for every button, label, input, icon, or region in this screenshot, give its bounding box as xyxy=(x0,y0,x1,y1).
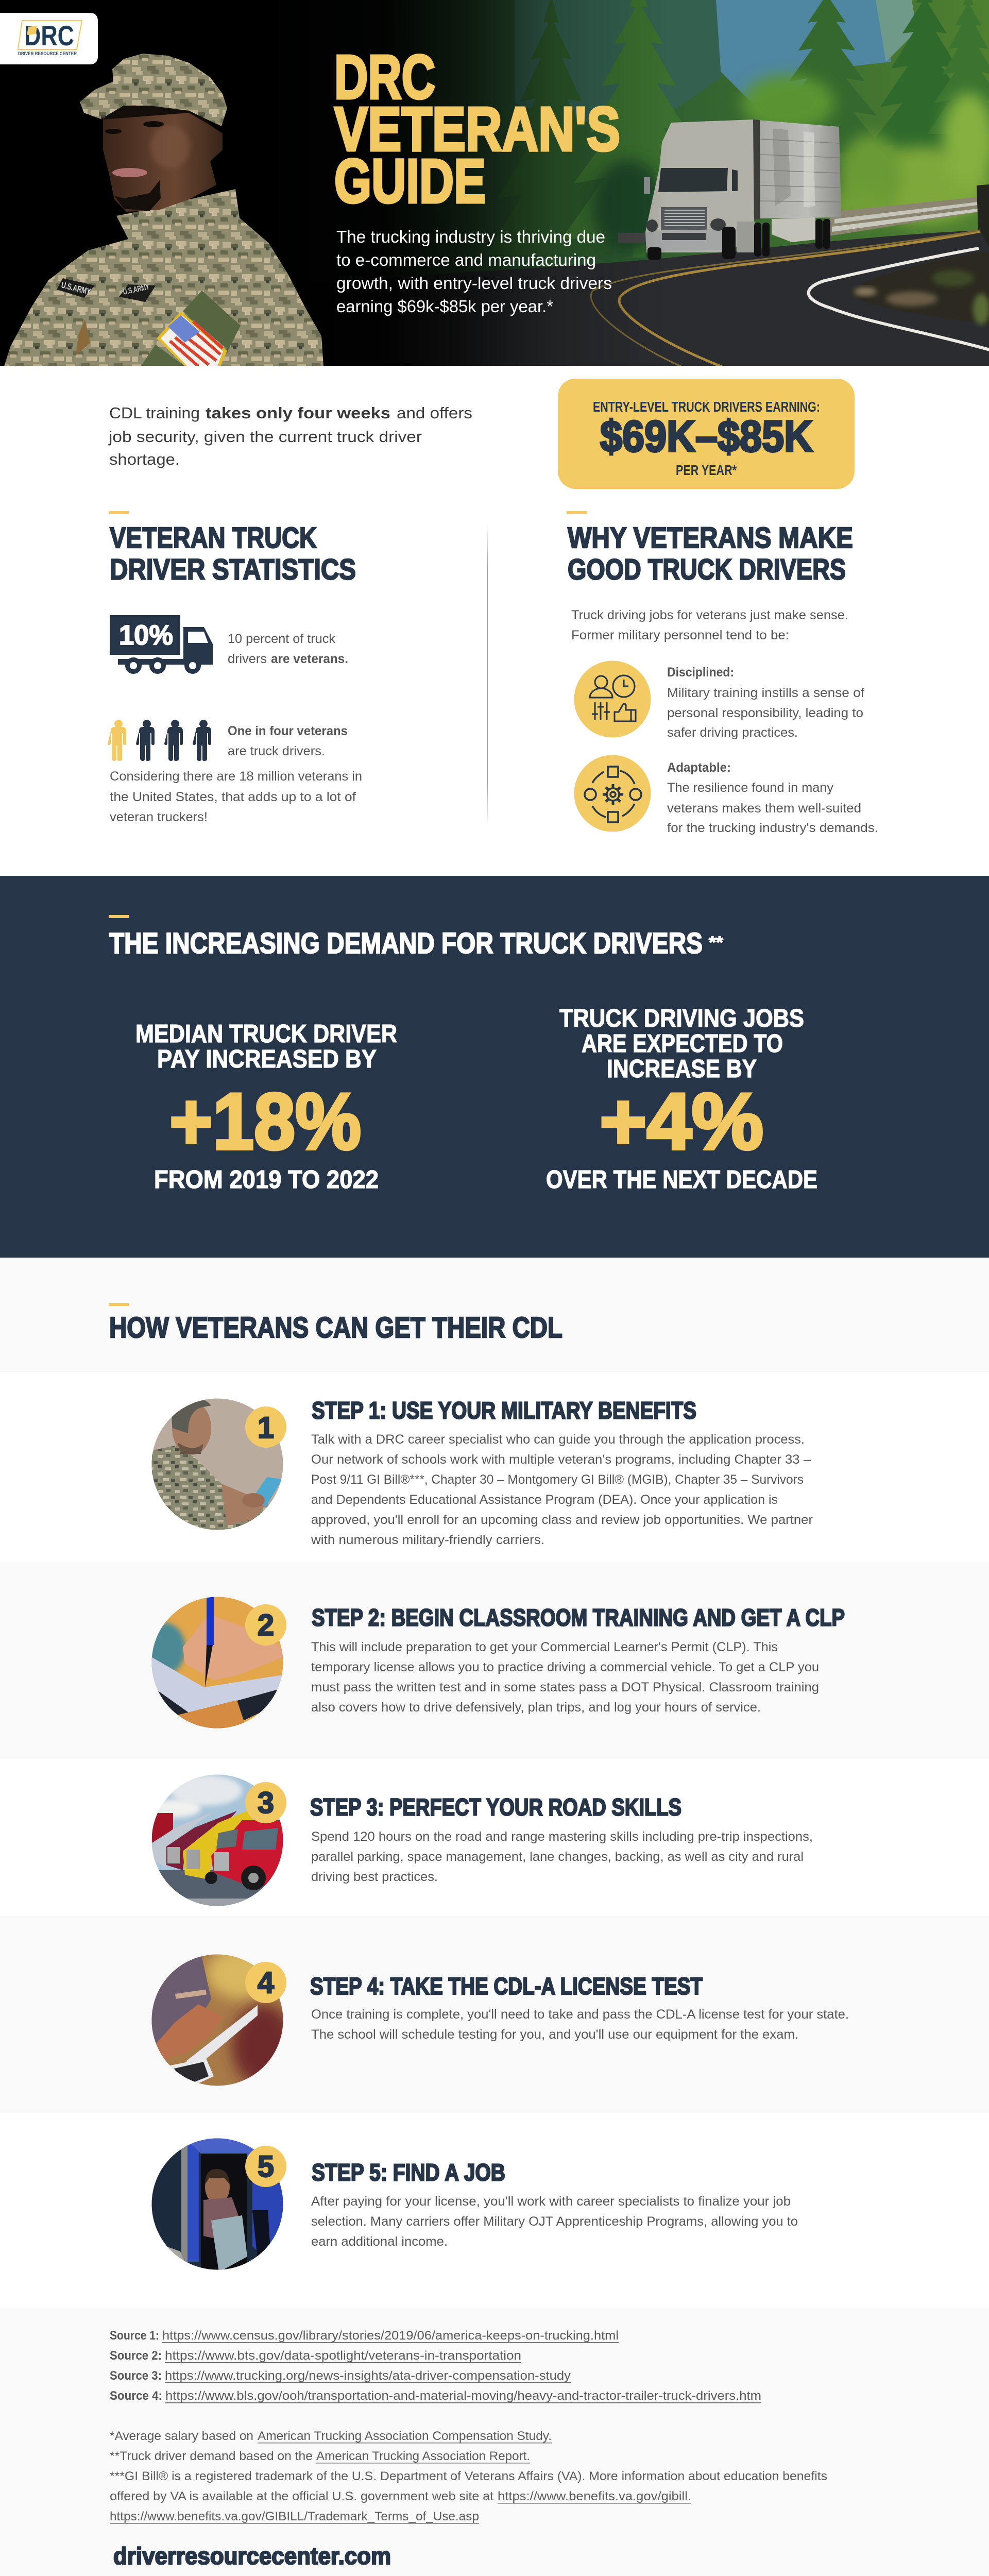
stat: 10 percent: are veterans. xyxy=(271,652,348,666)
icon: adaptable xyxy=(574,755,651,832)
stat: median pay: MEDIAN TRUCK DRIVER xyxy=(135,1020,397,1048)
step 5 body xyxy=(311,2194,798,2249)
step 5 xyxy=(0,2113,989,2308)
footnotes: https://www.benefits.va.gov/GIBILL/Trademark_Terms_of_Use.asp xyxy=(110,2510,479,2523)
step 2 body: This will include preparation to get your Commercial Learner's Permit (CLP). This xyxy=(311,1640,778,1654)
name tape left xyxy=(57,278,95,298)
hero title: VETERAN'S xyxy=(334,94,620,164)
stat: jobs increase xyxy=(546,1005,817,1194)
stat: 10 percent: 10 percent of truck xyxy=(228,632,335,646)
intro paragraph: and offers xyxy=(397,404,472,422)
block: disciplined: safer driving practices. xyxy=(667,725,798,740)
block: adaptable xyxy=(667,760,878,835)
photo: soldier with tablet xyxy=(149,1396,286,1535)
logo card xyxy=(0,13,98,64)
intro paragraph: CDL training xyxy=(109,404,200,422)
hero title xyxy=(334,42,620,216)
photo: trucks in a row xyxy=(149,1772,286,1911)
step 5 body: After paying for your license, you'll work with career specialists to finalize your job xyxy=(311,2194,791,2209)
heading: why veterans: GOOD TRUCK DRIVERS xyxy=(568,553,846,586)
step 2 heading: STEP 2: BEGIN CLASSROOM TRAINING AND GET A CLP xyxy=(312,1604,845,1631)
badge: 5: 5 xyxy=(258,2150,274,2183)
step 3 body: Spend 120 hours on the road and range mastering skills including pre-trip inspections, xyxy=(311,1829,813,1844)
step 4 heading: STEP 4: TAKE THE CDL-A LICENSE TEST xyxy=(310,1973,703,1999)
footnotes: American Trucking Association Compensation Study. xyxy=(258,2429,552,2443)
salary callout: ENTRY-LEVEL TRUCK DRIVERS EARNING: xyxy=(593,399,820,415)
badge: 2: 2 xyxy=(258,1608,274,1642)
panel: veteran truck driver statistics xyxy=(108,511,362,824)
heading: increasing demand: THE INCREASING DEMAND FOR TRUCK DRIVERS xyxy=(109,927,703,960)
sleeve chevron xyxy=(76,319,90,355)
icon: disciplined xyxy=(574,660,651,738)
salary callout: PER YEAR* xyxy=(676,462,737,478)
stat: one in four: are truck drivers. xyxy=(228,744,325,758)
step 2 body: also covers how to drive defensively, plan trips, and log your hours of service. xyxy=(311,1700,761,1715)
sources: Source 4: xyxy=(110,2389,162,2403)
intro paragraph: shortage. xyxy=(109,450,180,468)
stat: 10 percent xyxy=(228,632,348,666)
sources: https://www.bls.gov/ooh/transportation-and-material-moving/heavy-and-tractor-trailer-truck-drivers.htm xyxy=(165,2389,761,2403)
stat: 10 percent: drivers xyxy=(228,652,267,666)
hero paragraph: The trucking industry is thriving due xyxy=(336,227,605,246)
badge: 3 xyxy=(245,1782,286,1823)
sources xyxy=(110,2329,761,2403)
heading: why veterans: WHY VETERANS MAKE xyxy=(568,521,853,554)
footnotes: *Average salary based on xyxy=(110,2429,253,2443)
stat: median pay xyxy=(135,1020,397,1194)
sources: Source 1: xyxy=(110,2329,159,2343)
stat: median pay: +18% xyxy=(169,1077,361,1166)
step 1 body: with numerous military-friendly carriers. xyxy=(311,1533,544,1547)
intro paragraph: takes only four weeks xyxy=(206,404,390,422)
badge: 1: 1 xyxy=(258,1411,274,1445)
intro text xyxy=(571,608,848,642)
step 3 body xyxy=(311,1829,813,1884)
stat: jobs increase: INCREASE BY xyxy=(607,1055,757,1083)
step 1 heading: STEP 1: USE YOUR MILITARY BENEFITS xyxy=(312,1397,696,1424)
badge: 4: 4 xyxy=(258,1966,274,1999)
hero paragraph: to e-commerce and manufacturing xyxy=(336,250,596,269)
step 5 heading: STEP 5: FIND A JOB xyxy=(312,2159,505,2185)
semi truck xyxy=(644,120,841,260)
stat: one in four xyxy=(110,724,362,824)
step 1 xyxy=(0,1372,989,1562)
sources: Source 3: xyxy=(110,2369,162,2383)
step 4 body xyxy=(311,2007,849,2042)
stat: one in four: veteran truckers! xyxy=(110,810,208,824)
footnotes: https://www.benefits.va.gov/gibill. xyxy=(498,2489,691,2503)
intro paragraph: job security, given the current truck driver xyxy=(108,428,422,446)
heading: statistics: VETERAN TRUCK xyxy=(110,521,317,554)
velcro patch xyxy=(183,291,241,350)
hero title: GUIDE xyxy=(334,146,486,216)
block: disciplined: Disciplined: xyxy=(667,665,734,680)
block: disciplined: Military training instills a sense of xyxy=(667,686,864,700)
stat: jobs increase: TRUCK DRIVING JOBS xyxy=(559,1005,804,1032)
step 1 body xyxy=(311,1432,813,1547)
footnotes: American Trucking Association Report. xyxy=(316,2449,530,2463)
sources: Source 2: xyxy=(110,2349,162,2363)
footnotes: offered by VA is available at the official U.S. government web site at xyxy=(110,2489,493,2503)
block: adaptable: veterans makes them well-suited xyxy=(667,801,861,816)
badge: 5 xyxy=(245,2146,286,2187)
stat: jobs increase: +4% xyxy=(600,1077,763,1166)
intro text: Truck driving jobs for veterans just make sense. xyxy=(571,608,848,622)
salary callout xyxy=(558,379,855,489)
badge: 1 xyxy=(245,1406,286,1448)
stat: one in four: the United States, that adds up to a lot of xyxy=(110,790,356,804)
logo card: DRIVER RESOURCE CENTER xyxy=(18,51,77,57)
step 3 xyxy=(0,1759,989,1916)
footnotes: **Truck driver demand based on the xyxy=(110,2449,313,2463)
photo: clipboard inspection xyxy=(149,1947,294,2089)
soldier portrait xyxy=(4,54,323,366)
step 4 body: The school will schedule testing for you, and you'll use our equipment for the exam. xyxy=(311,2027,798,2042)
stat: jobs increase: OVER THE NEXT DECADE xyxy=(546,1166,817,1194)
icon: one in four people xyxy=(108,720,211,761)
american flag patch xyxy=(157,311,227,366)
heading: increasing demand: ** xyxy=(709,933,724,952)
step 3 heading: STEP 3: PERFECT YOUR ROAD SKILLS xyxy=(310,1794,681,1821)
footnotes xyxy=(110,2429,827,2523)
hero paragraph xyxy=(336,227,612,316)
dark left fade overlay xyxy=(258,0,670,366)
badge: 4 xyxy=(245,1962,286,2003)
soldier face xyxy=(103,113,223,212)
hero paragraph: growth, with entry-level truck drivers xyxy=(336,274,612,293)
section header: how veterans can get their CDL xyxy=(0,1258,989,1372)
guardrail and rock wall xyxy=(618,184,989,247)
panel: why veterans make good truck drivers xyxy=(567,511,878,835)
block: adaptable: Adaptable: xyxy=(667,760,731,775)
step 2 body xyxy=(311,1640,819,1715)
soldier uniform xyxy=(4,189,323,366)
step 5 body: selection. Many carriers offer Military OJT Apprenticeship Programs, allowing you to xyxy=(311,2214,798,2229)
name tape right: U.S.ARMY xyxy=(122,282,150,297)
step 1 body: Our network of schools work with multiple veteran's programs, including Chapter 33 – xyxy=(311,1452,811,1467)
step 2 xyxy=(0,1562,989,1759)
heading: statistics: DRIVER STATISTICS xyxy=(110,553,356,586)
block: disciplined xyxy=(667,665,864,740)
logo card: DRC xyxy=(24,20,74,52)
badge: 2 xyxy=(245,1604,286,1646)
icon: truck with 10%: 10% xyxy=(119,620,173,651)
icon: truck with 10% xyxy=(110,615,213,674)
hero paragraph: earning $69k-$85k per year.* xyxy=(336,297,553,316)
sources: https://www.trucking.org/news-insights/ata-driver-compensation-study xyxy=(165,2369,571,2383)
step 3 body: driving best practices. xyxy=(311,1870,438,1884)
hero banner xyxy=(0,0,989,367)
photo: driver in blue truck xyxy=(149,2136,286,2272)
step 4 xyxy=(0,1916,989,2113)
block: adaptable: The resilience found in many xyxy=(667,781,833,795)
website: driverresourcecenter.com xyxy=(113,2543,391,2569)
step 2 body: temporary license allows you to practice driving a commercial vehicle. To get a CLP you xyxy=(311,1660,819,1674)
hero background: forest and mountains xyxy=(401,0,989,276)
block: disciplined: personal responsibility, leading to xyxy=(667,706,863,720)
photo: hand writing xyxy=(144,1595,286,1734)
winding road xyxy=(418,230,989,366)
stat: one in four: Considering there are 18 million veterans in xyxy=(110,769,362,784)
center divider xyxy=(487,524,488,826)
step 1 body: Post 9/11 GI Bill®***, Chapter 30 – Montgomery GI Bill® (MGIB), Chapter 35 – Survivors xyxy=(311,1472,804,1487)
hero title: DRC xyxy=(334,42,435,112)
stat: one in four: One in four veterans xyxy=(228,724,348,738)
step 1 body: and Dependents Educational Assistance Program (DEA). Once your application is xyxy=(311,1493,778,1507)
intro text: Former military personnel tend to be: xyxy=(571,628,789,642)
stat: median pay: FROM 2019 TO 2022 xyxy=(154,1166,379,1194)
heading: why veterans xyxy=(568,521,853,586)
section header: how veterans can get their CDL: HOW VETERANS CAN GET THEIR CDL xyxy=(109,1311,562,1344)
footnotes: ***GI Bill® is a registered trademark of the U.S. Department of Veterans Affairs (VA). More information about education benefits xyxy=(110,2469,827,2483)
intro paragraph xyxy=(108,404,472,468)
badge: 3: 3 xyxy=(258,1786,274,1820)
name tape right xyxy=(119,282,156,302)
name tape left: U.S.ARMY xyxy=(60,280,92,297)
step 2 body: must pass the written test and in some states pass a DOT Physical. Classroom training xyxy=(311,1680,819,1694)
step 1 body: approved, you'll enroll for an upcoming class and review job opportunities. We partner xyxy=(311,1513,813,1527)
sources: https://www.census.gov/library/stories/2019/06/america-keeps-on-trucking.html xyxy=(162,2329,619,2343)
sources: https://www.bts.gov/data-spotlight/veterans-in-transportation xyxy=(165,2349,521,2363)
block: adaptable: for the trucking industry's demands. xyxy=(667,821,878,835)
stat: median pay: PAY INCREASED BY xyxy=(157,1045,377,1073)
step 4 body: Once training is complete, you'll need to take and pass the CDL-A license test for your state. xyxy=(311,2007,849,2022)
stat: jobs increase: ARE EXPECTED TO xyxy=(582,1030,783,1058)
footer panel xyxy=(0,2308,989,2576)
soldier cap xyxy=(80,54,227,126)
step 1 body: Talk with a DRC career specialist who can guide you through the application process. xyxy=(311,1432,805,1447)
heading: statistics xyxy=(110,521,356,586)
salary callout: $69K–$85K xyxy=(600,412,813,461)
step 5 body: earn additional income. xyxy=(311,2234,448,2249)
step 3 body: parallel parking, space management, lane changes, backing, as well as city and rural xyxy=(311,1850,804,1864)
panel: increasing demand xyxy=(0,876,989,1258)
